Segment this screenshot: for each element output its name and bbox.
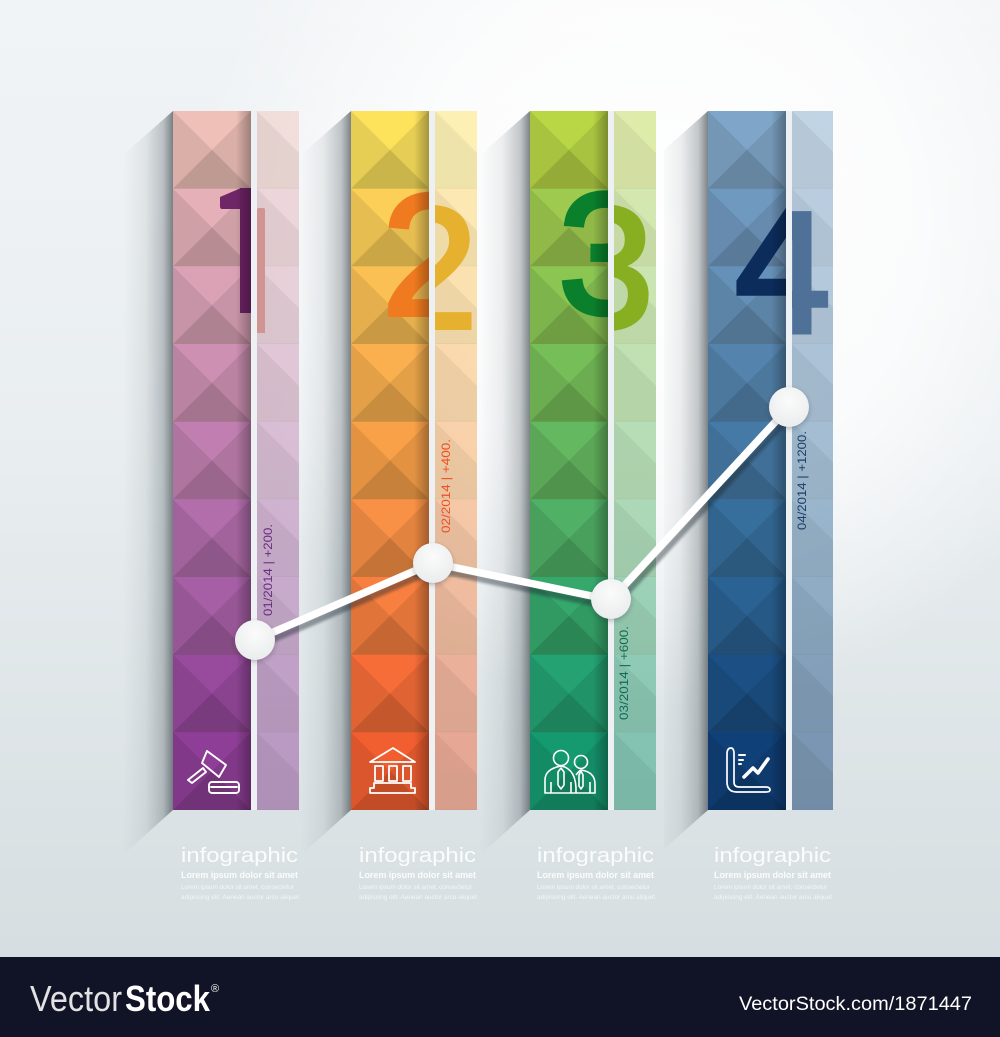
icon: line chart	[727, 748, 770, 792]
numeral 2: 2	[382, 172, 478, 364]
icon: gavel	[188, 751, 239, 793]
numeral 4: 4	[735, 177, 831, 369]
caption 1: infographic	[181, 845, 298, 867]
caption 4: Lorem ipsum dolor sit amet	[714, 870, 831, 880]
footer id: VectorStock.com/1871447	[739, 994, 972, 1015]
footer logo: Stock	[125, 978, 211, 1019]
numeral 2	[388, 192, 472, 330]
footer logo	[30, 978, 219, 1019]
column 1: purple	[135, 111, 299, 842]
icon: business people	[545, 750, 595, 793]
caption 3: Lorem ipsum dolor sit amet, consectetur	[537, 884, 651, 891]
line chart: trend	[235, 387, 809, 662]
caption 4: adipiscing elit. Aenean auctor arcu aliquet	[714, 894, 832, 901]
numeral 1: 1	[203, 150, 304, 352]
caption 2: adipiscing elit. Aenean auctor arcu aliquet	[359, 894, 477, 901]
caption 4: Lorem ipsum dolor sit amet, consectetur	[714, 884, 828, 891]
numeral 3: 3	[558, 158, 654, 350]
caption 1: Lorem ipsum dolor sit amet, consectetur	[181, 884, 295, 891]
caption 2: Lorem ipsum dolor sit amet, consectetur	[359, 884, 473, 891]
label: 03/2014: 03/2014 | +600.	[617, 626, 631, 720]
column 3: green	[480, 111, 656, 855]
caption 1: adipiscing elit. Aenean auctor arcu aliquet	[181, 894, 299, 901]
caption 4	[714, 845, 832, 901]
caption 3: infographic	[537, 845, 654, 867]
label: 04/2014: 04/2014 | +1200.	[795, 431, 809, 530]
numeral 3: 3	[558, 172, 654, 364]
caption 3: Lorem ipsum dolor sit amet	[537, 870, 654, 880]
footer bar	[0, 957, 1000, 1037]
line shadow	[257, 414, 791, 646]
caption 3	[537, 845, 655, 901]
footer logo: Vector	[30, 978, 122, 1019]
caption 2: infographic	[359, 845, 476, 867]
caption 1	[181, 845, 299, 901]
footer logo: ®	[211, 983, 219, 995]
caption 1: Lorem ipsum dolor sit amet	[181, 870, 298, 880]
numeral 4: 4	[735, 165, 831, 357]
caption 2: Lorem ipsum dolor sit amet	[359, 870, 476, 880]
numeral 1: 1	[215, 170, 316, 372]
icon: bank building	[370, 748, 415, 793]
column 4: blue	[664, 111, 833, 849]
caption 4: infographic	[714, 845, 831, 867]
numeral 1	[220, 188, 265, 333]
numeral 3	[562, 190, 649, 331]
numeral 2: 2	[382, 160, 478, 352]
label: 01/2014: 01/2014 | +200.	[261, 524, 275, 616]
column 2: orange	[301, 111, 478, 855]
label: 02/2014: 02/2014 | +400.	[439, 439, 453, 533]
line	[255, 407, 789, 640]
numeral 4	[736, 208, 828, 334]
caption 2	[359, 845, 477, 901]
caption 3: adipiscing elit. Aenean auctor arcu aliquet	[537, 894, 655, 901]
data points	[235, 387, 809, 662]
